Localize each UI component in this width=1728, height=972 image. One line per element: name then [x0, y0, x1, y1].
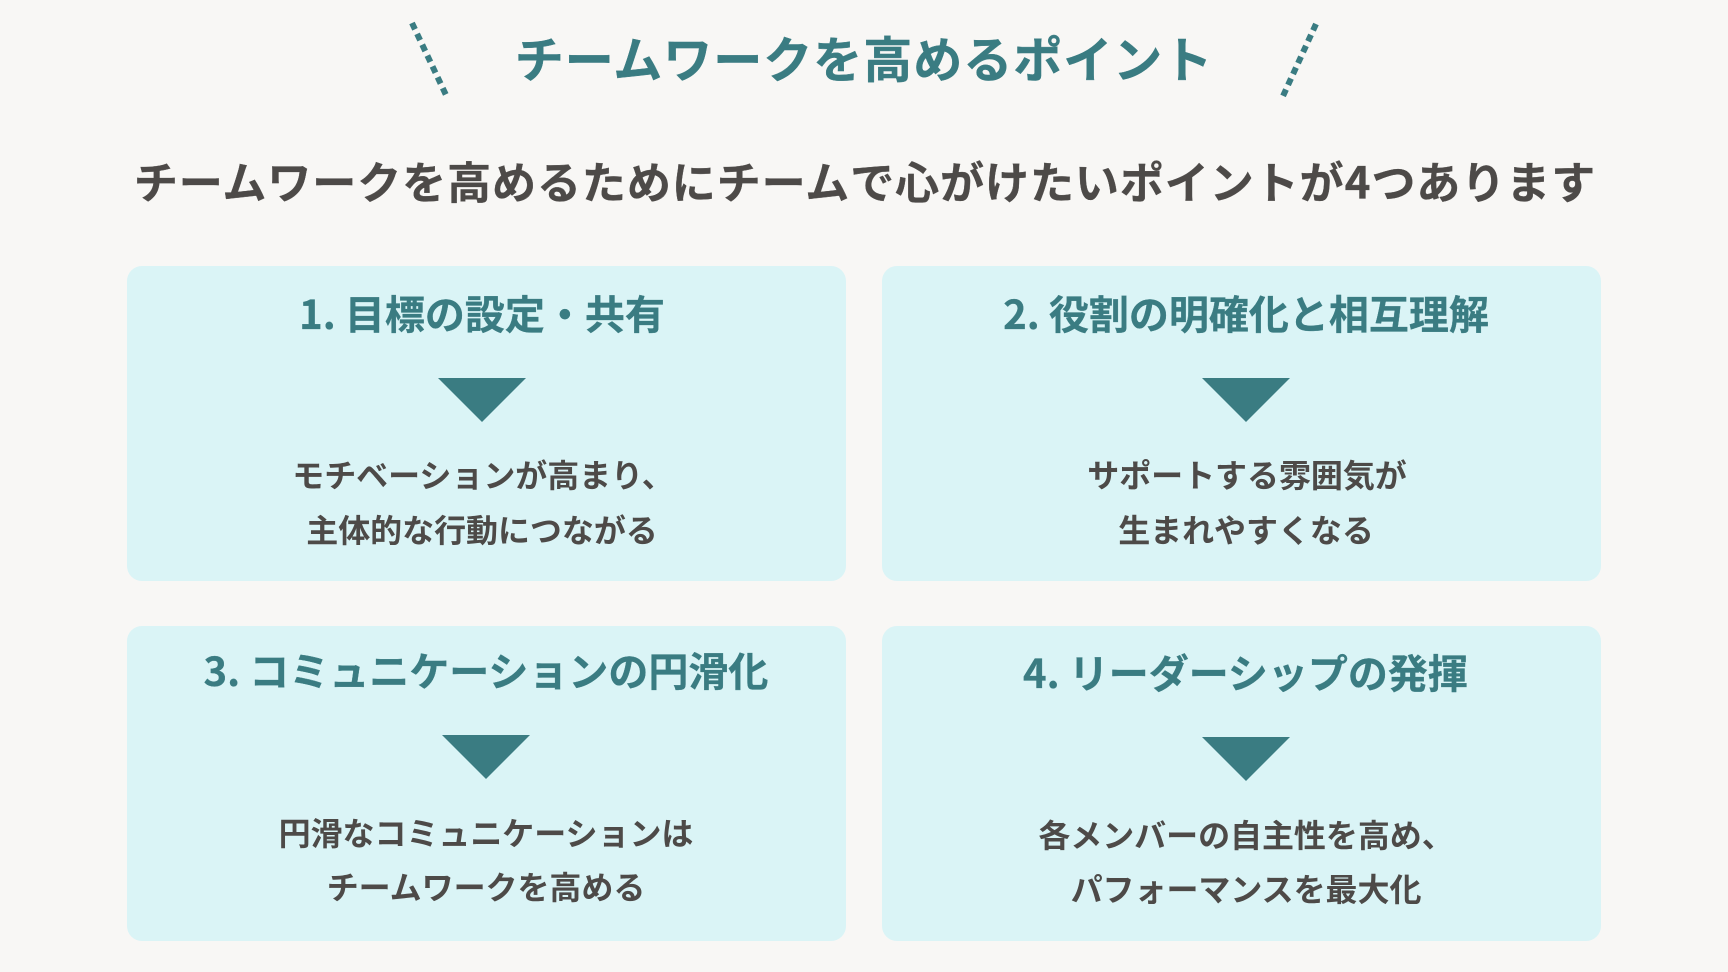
card 3 text line 1: 円滑なコミュニケーションは [279, 808, 693, 854]
decorative dotted line: right [1280, 22, 1319, 98]
card 3 text line 2: チームワークを高める [327, 862, 645, 908]
decorative dotted line: left [409, 22, 448, 96]
card 2 arrow [1202, 378, 1290, 422]
card 1 arrow [438, 378, 526, 422]
card 4 heading: 4. リーダーシップの発揮 [1023, 642, 1468, 700]
panel: card 4 background [882, 626, 1601, 941]
card 1 heading: 1. 目標の設定・共有 [299, 282, 665, 340]
title: チームワークを高めるポイント [515, 22, 1213, 93]
card 4 text line 1: 各メンバーの自主性を高め、 [1038, 810, 1454, 856]
panel: card 2 background [882, 266, 1601, 581]
card 4 text line 2: パフォーマンスを最大化 [1071, 864, 1421, 910]
panel: card 1 background [127, 266, 846, 581]
card 3 heading: 3. コミュニケーションの円滑化 [204, 640, 768, 698]
card 4 arrow [1202, 737, 1290, 781]
card 2 heading: 2. 役割の明確化と相互理解 [1003, 282, 1489, 340]
card 1 text line 1: モチベーションが高まり、 [292, 450, 674, 496]
card 2 text line 2: 生まれやすくなる [1118, 505, 1374, 551]
card 3 arrow [442, 735, 530, 779]
card 1 text line 2: 主体的な行動につながる [306, 505, 658, 551]
subtitle: チームワークを高めるためにチームで心がけたいポイントが4つあります [134, 148, 1596, 212]
panel: card 3 background [127, 626, 846, 941]
card 2 text line 1: サポートする雰囲気が [1087, 450, 1407, 496]
